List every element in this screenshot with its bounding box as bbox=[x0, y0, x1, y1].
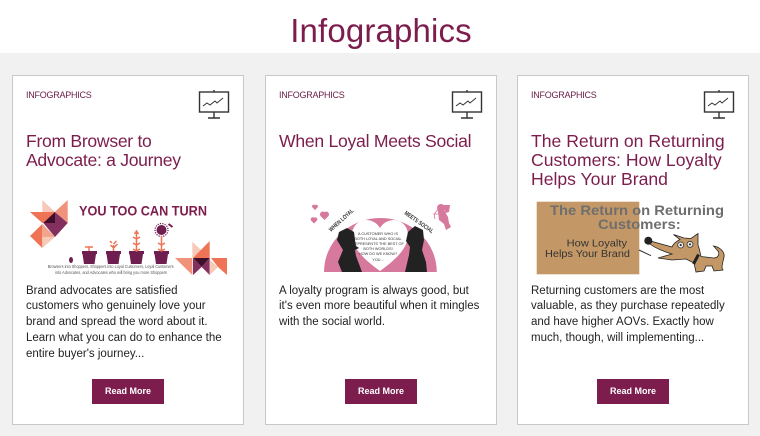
heart message: BOTH LOYAL AND SOCIAL bbox=[354, 236, 401, 240]
body text bbox=[279, 284, 479, 328]
illustration: dog and cardboard bbox=[536, 202, 725, 274]
caption: Browsers into Shoppers, Shoppers into Loyal Customers, Loyal Customers bbox=[47, 264, 173, 269]
image subtitle: Helps Your Brand bbox=[544, 248, 630, 260]
button bbox=[345, 379, 417, 404]
heading: Customers: How Loyalty bbox=[531, 150, 722, 170]
icon: presentation chart bbox=[198, 90, 230, 119]
heart message: BOTH WORLDS! bbox=[363, 246, 392, 250]
pink arch bbox=[324, 218, 436, 272]
heading: Helps Your Brand bbox=[531, 169, 668, 189]
heart message: A CUSTOMER WHO IS bbox=[357, 232, 398, 236]
button bbox=[597, 379, 669, 404]
cardboard bbox=[536, 201, 639, 274]
heading bbox=[26, 130, 181, 170]
title: Infographics bbox=[290, 12, 472, 49]
illustration: you too can turn: into Advocates, and Advocates who will bring you more Shoppers bbox=[54, 269, 166, 274]
hearts and cupid bbox=[310, 204, 450, 230]
label: meets social: MEETS SOCIAL bbox=[402, 210, 434, 235]
button: Read More bbox=[105, 386, 151, 396]
body text: it's even more beautiful when it mingles bbox=[279, 300, 479, 312]
banner words: YOU TOO CAN TURN bbox=[78, 203, 206, 218]
body text: customers who genuinely love your bbox=[26, 300, 206, 312]
body text: valuable, as they purchase repeatedly bbox=[531, 300, 725, 312]
heading: When Loyal Meets Social bbox=[279, 130, 471, 150]
body text: A loyalty program is always good, but bbox=[279, 284, 469, 296]
dog bbox=[638, 233, 724, 272]
icon: presentation chart bbox=[452, 90, 482, 119]
left pinwheel bbox=[30, 200, 67, 248]
heading bbox=[531, 130, 725, 189]
bee bbox=[168, 224, 172, 226]
panel: card 3 bbox=[517, 75, 749, 425]
body text: with the social world. bbox=[279, 316, 385, 328]
image title: The Return on Returning bbox=[550, 202, 724, 218]
cupid bow bbox=[432, 210, 442, 218]
white heart bbox=[352, 220, 408, 270]
heading: From Browser to bbox=[26, 130, 152, 150]
heart message bbox=[352, 232, 404, 262]
body text: Brand advocates are satisfied bbox=[26, 284, 178, 296]
left silhouette bbox=[336, 228, 362, 272]
body text bbox=[26, 284, 222, 360]
body text bbox=[531, 284, 725, 344]
body text: Returning customers are the most bbox=[531, 284, 704, 296]
category tag: INFOGRAPHICS bbox=[279, 90, 345, 100]
image title: Customers: bbox=[598, 216, 680, 232]
heading: Advocate: a Journey bbox=[26, 150, 181, 170]
panel: card 2 bbox=[265, 75, 497, 425]
heart message: YOU... bbox=[372, 258, 383, 262]
plant pots bbox=[68, 223, 168, 264]
body text: much, though, will implementing... bbox=[531, 332, 704, 344]
heart message: REPRESENTS THE BEST OF bbox=[352, 242, 404, 246]
right pinwheel bbox=[174, 240, 226, 274]
label: when loyal: WHEN LOYAL bbox=[328, 208, 355, 233]
category tag: INFOGRAPHICS bbox=[531, 90, 597, 100]
image subtitle bbox=[544, 237, 630, 260]
illustration: you too can turn bbox=[30, 200, 227, 275]
button: Read More bbox=[610, 386, 656, 396]
category tag: INFOGRAPHICS bbox=[26, 90, 92, 100]
plant stems and leaves bbox=[84, 230, 164, 250]
illustration: when loyal meets social bbox=[310, 204, 451, 272]
panel: card 1 bbox=[12, 75, 244, 425]
button bbox=[92, 379, 164, 404]
body text: entire buyer's journey... bbox=[26, 348, 144, 360]
button: Read More bbox=[358, 386, 404, 396]
icon: presentation chart bbox=[704, 90, 734, 119]
heart message: HOW DO WE KNOW? bbox=[358, 252, 397, 256]
heading: The Return on Returning bbox=[531, 130, 725, 150]
body text: and have higher AOVs. Exactly how bbox=[531, 316, 714, 328]
image subtitle: How Loyalty bbox=[566, 237, 627, 249]
right silhouette bbox=[404, 226, 426, 272]
image title bbox=[550, 202, 724, 232]
header band bbox=[0, 0, 760, 53]
body text: brand and spread the word about it. bbox=[26, 316, 208, 328]
body text: Learn what you can do to enhance the bbox=[26, 332, 222, 344]
